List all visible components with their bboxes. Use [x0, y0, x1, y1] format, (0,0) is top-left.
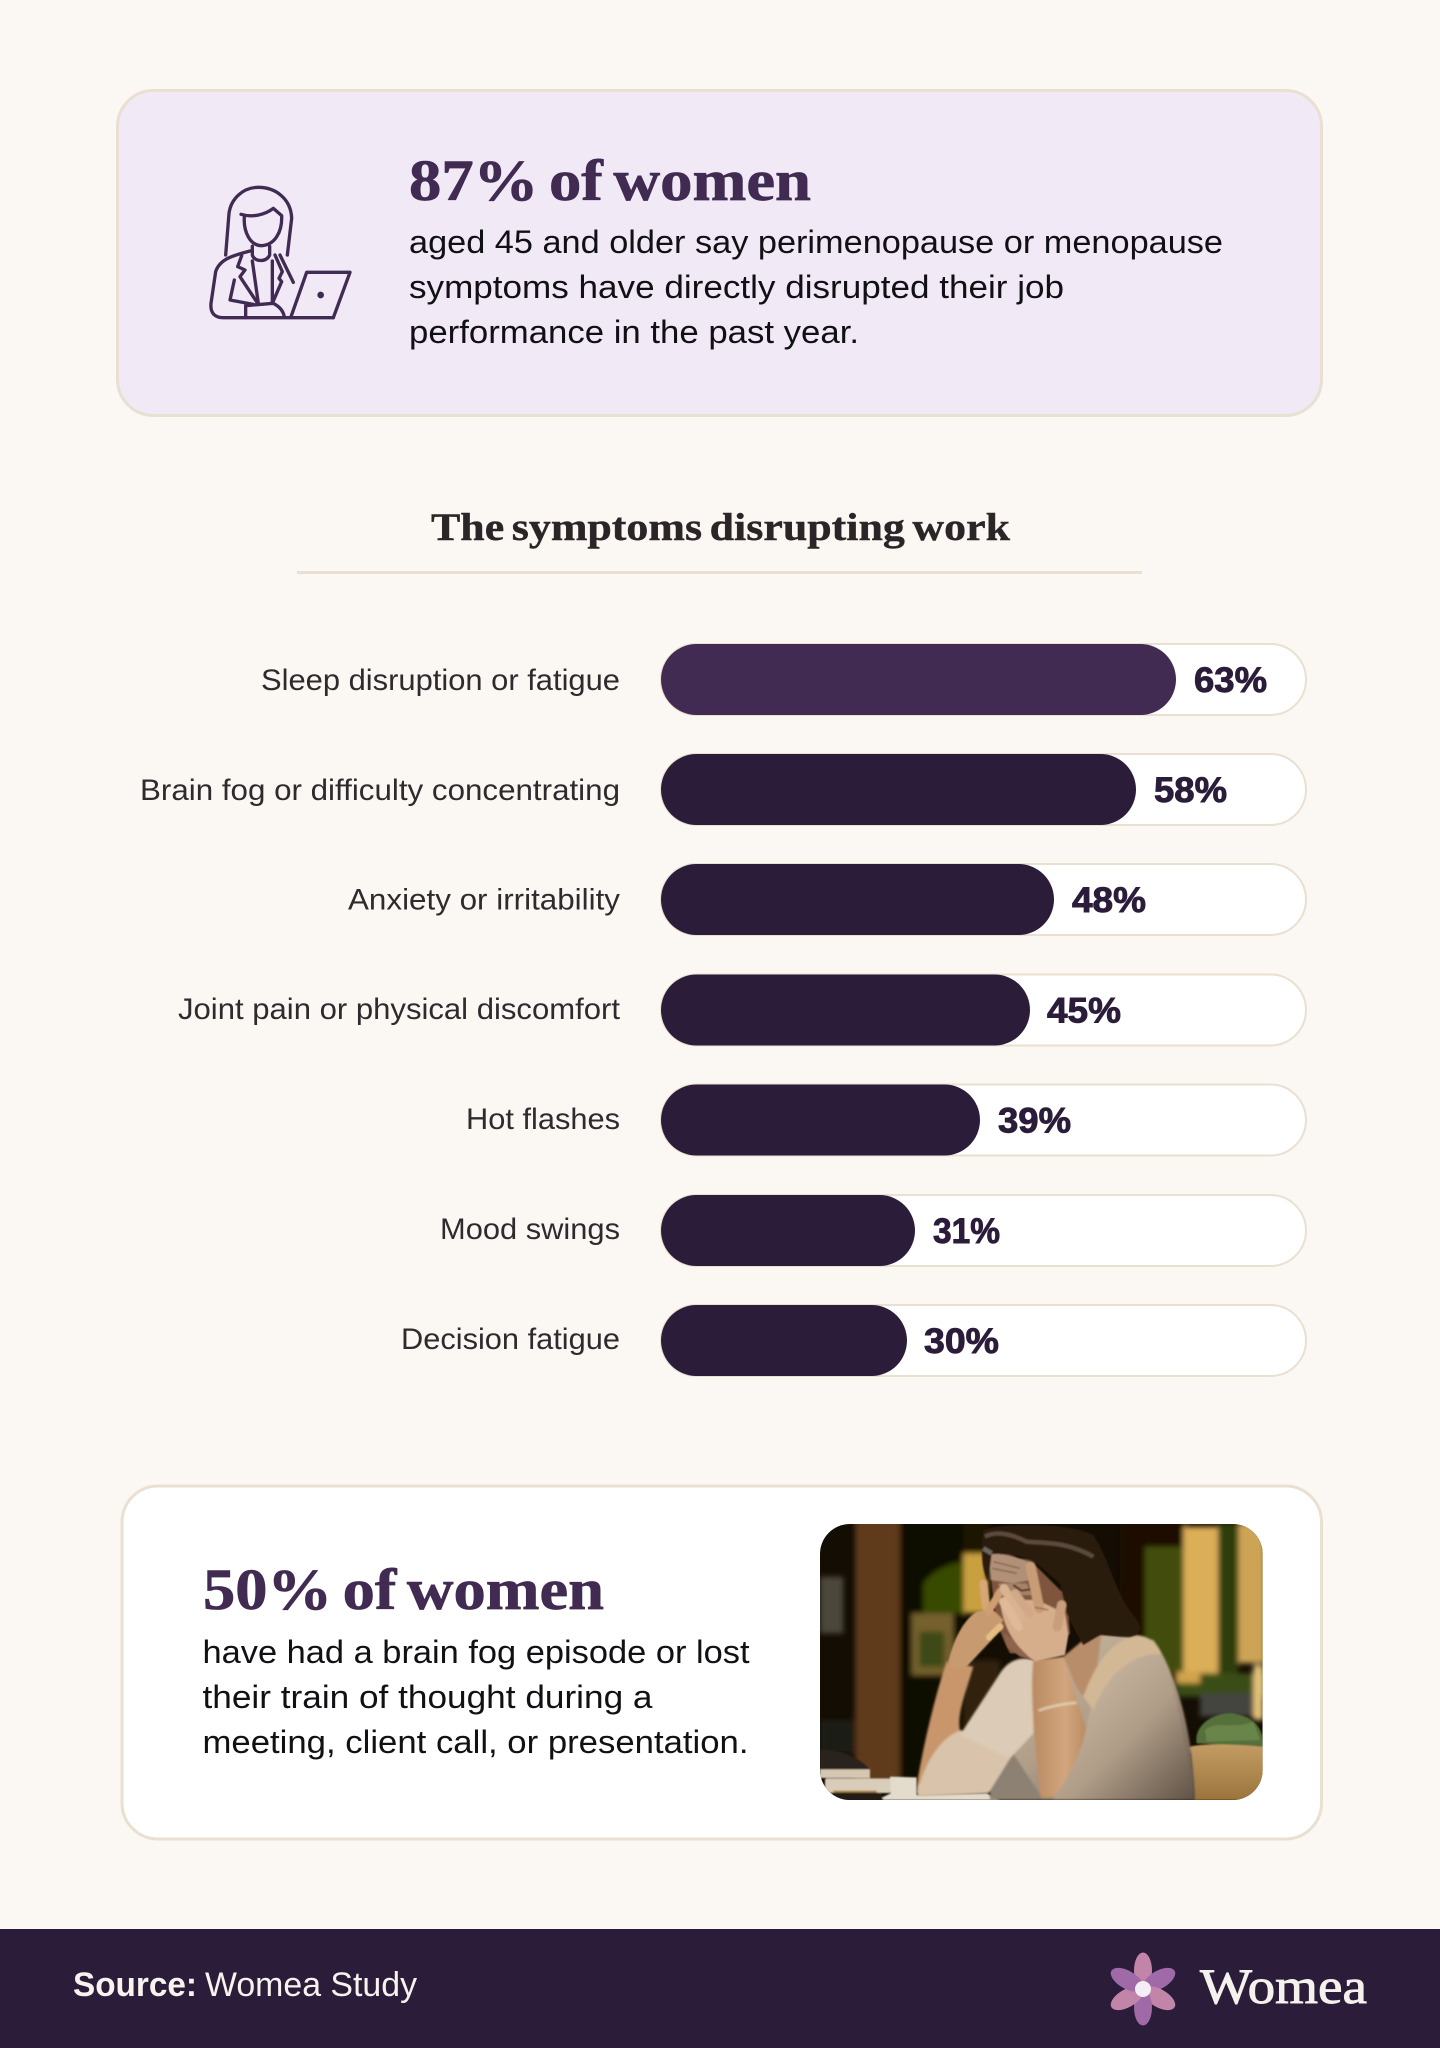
bar: decision fatigue: Decision fatigue: [401, 1323, 620, 1356]
icon: woman at laptop: [211, 187, 350, 318]
text block: top description: [409, 224, 1223, 350]
left hand: [948, 1608, 1003, 1670]
bar: sleep disruption: Sleep disruption or fatigue: [261, 664, 620, 697]
bar: mood swings: Mood swings: [440, 1213, 620, 1246]
right forearm: [1032, 1657, 1087, 1797]
text block: bottom description: their train of thought during a: [202, 1679, 653, 1715]
photo: woman rubbing her eyes at desk: [820, 1517, 1267, 1800]
panel: 50% of women callout: [122, 1486, 1322, 1839]
text block: top description: performance in the past year.: [409, 314, 859, 350]
text block: top description: aged 45 and older say perimenopause or menopause: [409, 224, 1223, 260]
bar: decision fatigue: [401, 1305, 1306, 1376]
plant pot: [1184, 1713, 1263, 1800]
desk items: [820, 1750, 1000, 1800]
logo: wordmark: Womea: [1200, 1958, 1367, 2014]
right sleeve: [1053, 1656, 1182, 1800]
woman: [917, 1633, 1195, 1800]
text block: bottom description: meeting, client call, or presentation.: [202, 1724, 748, 1760]
torso: [1000, 1634, 1196, 1800]
bar: decision fatigue: 30%: [924, 1322, 999, 1361]
source line: Womea Study: [205, 1966, 417, 2004]
bar: hot flashes: [466, 1084, 1306, 1156]
bar: anxiety: Anxiety or irritability: [348, 884, 620, 916]
bar: sleep disruption: [261, 644, 1306, 715]
bar: anxiety: 48%: [1072, 881, 1146, 920]
text block: bottom description: [202, 1634, 750, 1760]
bar: anxiety: [348, 864, 1306, 935]
footer band: [0, 1929, 1440, 2048]
logo: flower: [1107, 1952, 1179, 2026]
text block: top description: symptoms have directly disrupted their job: [409, 269, 1064, 305]
bar: brain fog: Brain fog or difficulty concentrating: [140, 774, 620, 807]
panel: 87% of women callout: [118, 90, 1322, 416]
right hand: [1000, 1600, 1068, 1662]
bar: brain fog: [140, 754, 1306, 825]
bar chart: symptoms: [140, 644, 1306, 1376]
bar: mood swings: [440, 1195, 1306, 1266]
head and hands: [948, 1525, 1140, 1670]
source line: Source:: [73, 1966, 197, 2004]
bar: joint pain: [178, 974, 1306, 1046]
bar: sleep disruption: 63%: [1194, 661, 1267, 700]
bar: brain fog: 58%: [1154, 771, 1227, 810]
left forearm: [917, 1662, 973, 1787]
heading: symptoms disrupting work: The symptoms disrupting work: [431, 506, 1010, 549]
bar: mood swings: 31%: [933, 1212, 1000, 1251]
left sleeve: [917, 1730, 1011, 1797]
text block: bottom description: have had a brain fog episode or lost: [202, 1634, 750, 1670]
heading: 87% of women: 87% of women: [409, 148, 811, 213]
bar: joint pain: Joint pain or physical discomfort: [178, 993, 620, 1026]
bar: hot flashes: Hot flashes: [466, 1103, 620, 1136]
neck and collar: [1062, 1635, 1102, 1696]
heading: 50% of women: 50% of women: [203, 1557, 604, 1622]
bar: joint pain: 45%: [1047, 992, 1121, 1030]
chin: [1003, 1633, 1033, 1660]
bar: hot flashes: 39%: [998, 1102, 1071, 1140]
